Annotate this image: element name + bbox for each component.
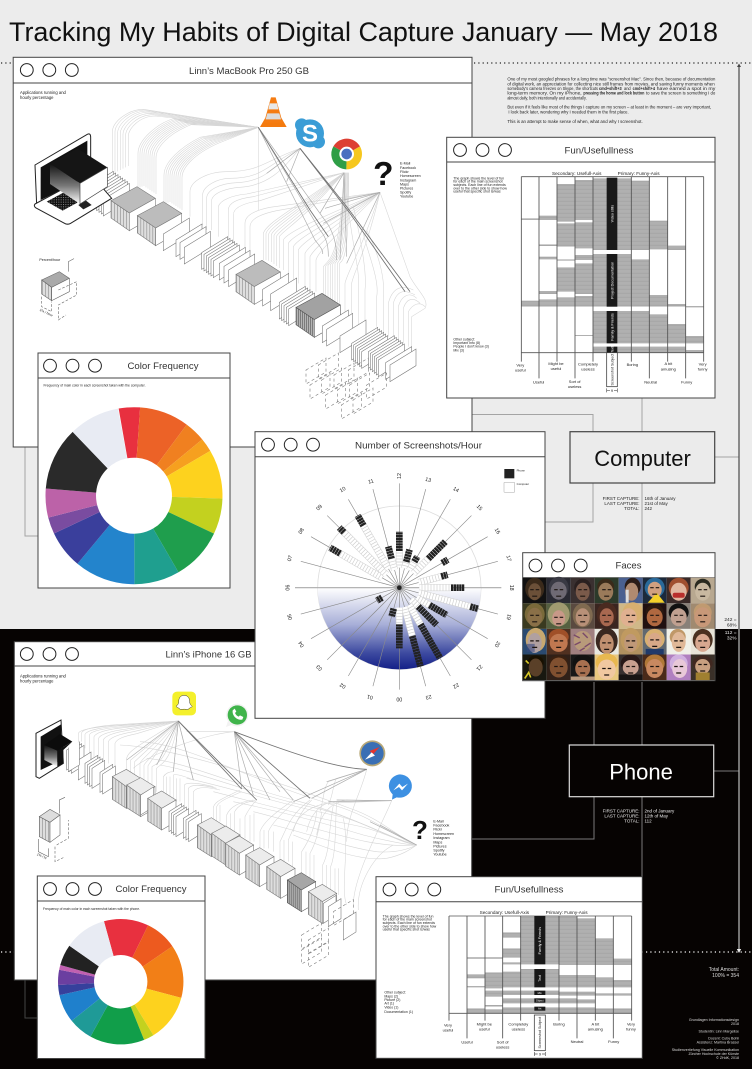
legend: percent per hour <box>39 258 77 320</box>
intro text: This is an attempt to make sense of when, what and why I screenshot. <box>507 119 643 124</box>
axes <box>449 916 632 1038</box>
window buttons <box>454 144 511 156</box>
intro text: long-term memory. On my iPhone, <box>507 91 582 96</box>
hour labels: 17 <box>504 555 512 562</box>
phone capture stats: 2nd of January <box>644 808 675 814</box>
panel: Phone label box: Phone <box>609 760 673 784</box>
computer share: 68% <box>727 622 737 628</box>
window buttons <box>44 883 101 895</box>
heading: Number of Screenshots/Hour <box>355 440 483 452</box>
axis labels: Funny <box>681 380 692 385</box>
subject blocks <box>607 178 617 353</box>
other subject list: Mix (3) <box>453 349 464 353</box>
axis labels: Might be <box>477 1022 492 1027</box>
window buttons <box>20 648 78 660</box>
caption: hourly percentage <box>20 95 54 100</box>
description: The graph shows the level of fun <box>383 914 434 918</box>
icon: Skype <box>295 118 325 148</box>
phone capture stats: LAST CAPTURE: <box>604 814 640 818</box>
flow lines <box>112 109 426 347</box>
axis labels <box>443 1021 636 1049</box>
axes <box>521 177 704 378</box>
hour labels: 21 <box>475 663 483 672</box>
axis titles: Primary: Funny-Axis <box>546 910 588 915</box>
axis labels: Useful <box>461 1040 473 1045</box>
legend: other apps: Instagram <box>433 836 450 840</box>
description: useful that specific shot is/was <box>383 928 430 932</box>
icon: laptop <box>34 134 112 224</box>
panel: Computer label box <box>570 432 715 483</box>
legend: percent per hour <box>36 797 68 862</box>
legend: percent per hour: Percent/hour <box>39 258 61 262</box>
panel: Fun/Usefullness computer <box>447 137 715 398</box>
computer capture stats <box>603 496 676 511</box>
axis labels: Boring <box>553 1022 565 1027</box>
axis labels: funny <box>626 1027 636 1032</box>
total amount: Total Amount: <box>709 967 739 973</box>
legend: other apps: Youtube <box>400 195 413 199</box>
center hub <box>397 585 402 590</box>
subject labels: Family & Friends <box>538 927 542 954</box>
icon: Skype: S <box>302 121 318 148</box>
axis labels: A bit <box>591 1021 599 1026</box>
computer capture stats: 242 <box>644 506 653 511</box>
panel: Phone label box <box>569 745 714 797</box>
credits: Studentin: Linn Margelise <box>698 1030 739 1034</box>
dashed empty hours <box>302 900 353 967</box>
panel: MacBook window <box>13 57 472 447</box>
axis labels: Might be <box>548 361 564 366</box>
axis labels: useless <box>568 384 581 389</box>
phone capture stats: TOTAL: <box>624 818 640 824</box>
axis labels: Very <box>516 362 524 367</box>
description: subjects. Each line of fun extends <box>383 921 435 925</box>
legend: other apps: Facebook <box>433 824 450 828</box>
bands <box>467 917 632 1013</box>
caption: Frequency of main color in each screenshot taken with the phone. <box>43 907 140 911</box>
screenshot subject box <box>534 1015 545 1057</box>
window buttons <box>44 359 101 372</box>
screenshot subject box: 9 <box>539 1052 542 1057</box>
hour labels: 14 <box>452 486 460 494</box>
axis labels: Completely <box>508 1022 528 1027</box>
phone capture stats <box>603 808 675 824</box>
intro text: almost daily, both intentionally and accidentally. <box>507 95 587 100</box>
chart: radial hours <box>285 469 529 702</box>
total axis with arrows <box>737 64 741 953</box>
application flow diagram: phone <box>20 674 454 967</box>
legend: percent per hour: 1% / hr <box>36 852 48 861</box>
description: for each of the main screenshot <box>453 180 503 184</box>
credits: Dozent: Cuby Bohli <box>708 1036 739 1040</box>
intro text: cmd+shift+4 <box>633 86 656 91</box>
panel: Number of Screenshots per Hour <box>255 432 545 718</box>
hour labels: 05 <box>287 613 294 620</box>
panel: Color Frequency phone <box>37 876 205 1058</box>
axis labels: Very <box>444 1023 452 1028</box>
axis titles: Primary: Funny-Axis <box>618 171 660 176</box>
window buttons <box>383 883 441 896</box>
subject labels: Text <box>610 346 614 353</box>
other subject list: Other subject: <box>453 337 475 341</box>
axis labels: Funny <box>608 1039 619 1044</box>
heading: Fun/Usefullness <box>494 884 564 896</box>
axis labels: useless <box>581 367 595 372</box>
screenshot subject box: Screenshot Subject <box>610 354 614 386</box>
computer capture stats: TOTAL: <box>624 506 640 511</box>
computer share: 242 = <box>724 617 737 623</box>
subject labels: Object <box>536 999 544 1003</box>
description: useful that specific shot is/was <box>453 190 501 194</box>
intro text: But even if it feels like most of the things I capture on my screen – at least in the moment – are very important, <box>507 105 711 110</box>
background: black phone half <box>0 629 752 1069</box>
subject labels: Art <box>538 1007 542 1011</box>
axis labels: useful <box>551 366 561 371</box>
dotted timeline bottom <box>1 951 752 953</box>
heading: MacBook: Linn’s MacBook Pro 250 GB <box>189 66 309 77</box>
legend: other apps: Spotify <box>433 849 445 853</box>
axis labels: funny <box>698 367 708 372</box>
panel: Color Frequency computer <box>38 353 230 588</box>
heading: Color Frequency <box>128 361 199 372</box>
hour labels: 12 <box>397 473 403 479</box>
axis titles: Secondary: Usefull-Axis <box>552 171 602 176</box>
subject labels <box>536 927 544 1011</box>
panel: Computer label box: Computer <box>594 446 691 471</box>
intro text: I look back later, wondering why I needed them in the first place. <box>508 109 629 114</box>
legend: other apps: Pictures <box>400 186 413 190</box>
heading: Fun/Usefullness <box>564 146 634 156</box>
legend: Phone <box>517 469 525 473</box>
intro text: cmd+shift+3 <box>599 86 622 91</box>
axis labels: Neutral <box>571 1039 584 1044</box>
subject labels: Family & Friends <box>610 313 614 341</box>
credits: Zürcher Hochschule der Künste <box>688 1052 739 1056</box>
panel: Faces <box>523 553 715 681</box>
donut: computer colors <box>61 422 207 569</box>
icon: Snapchat <box>172 692 196 715</box>
hour labels: 02 <box>339 681 347 689</box>
hour labels: 18 <box>508 585 514 591</box>
hour labels: 04 <box>298 640 306 648</box>
intro text: to save the screen is something I do <box>646 91 716 96</box>
axis labels: useful <box>515 367 526 372</box>
screenshot subject box: 9 <box>611 388 614 393</box>
description: for each of the main screenshot <box>383 918 432 922</box>
intro text: One of my most googled phrases for a long time was "screenshot Mac". Since then, because of documentation <box>507 77 716 82</box>
axis labels: amusing <box>661 366 676 371</box>
other subject list: Other subject: <box>384 991 406 995</box>
connector lines phone <box>25 682 739 1018</box>
legend: other apps: E-Mail <box>433 819 444 823</box>
axis labels: useful <box>479 1026 490 1031</box>
data stacks and boxes <box>87 171 416 382</box>
title: Tracking My Habits of Digital Capture January — May 2018 <box>9 17 718 47</box>
description: subjects. Each line of fun extends <box>453 183 506 187</box>
connector lines computer <box>25 398 739 553</box>
subject labels: Project Documentation <box>610 262 614 299</box>
legend: other apps: Facebook <box>400 166 416 170</box>
description: over to the other side to show how <box>453 186 507 190</box>
other subject list: Important Info (8) <box>453 341 480 345</box>
intro text: have earned a spot in my <box>657 86 717 91</box>
intro text: of digital work, an appreciation for collecting nice still frames from movies, and saving funny moments when <box>507 81 715 86</box>
legend: other apps: Pictures <box>433 844 447 848</box>
axis labels: Sort of <box>569 379 581 384</box>
axis labels: amusing <box>588 1026 603 1031</box>
computer capture stats: 16th of January <box>644 496 676 501</box>
caption: Frequency of main color in each screenshot taken with the computer. <box>44 384 146 388</box>
axis labels: Useful <box>533 380 544 385</box>
legend: other apps: Spotify <box>400 191 411 195</box>
phone capture stats: 12th of May <box>644 814 669 818</box>
description: The graph shows the level of fun <box>453 176 504 180</box>
window buttons <box>262 438 319 451</box>
credits: 2018 <box>731 1022 739 1026</box>
legend <box>504 469 529 492</box>
hour labels: 09 <box>315 504 324 512</box>
heading: Faces <box>616 560 642 572</box>
legend: percent per hour: 1% / hour <box>39 308 54 318</box>
subject labels: Video stills <box>610 205 614 222</box>
icon: Messenger <box>389 774 412 800</box>
dashed empty hours <box>306 353 387 419</box>
screenshot subject box: Screenshot Subject <box>538 1017 542 1049</box>
intro text: pressing the home and lock button <box>583 91 645 96</box>
legend: other apps: Homescreen <box>400 174 421 178</box>
axis labels: useful <box>443 1027 453 1032</box>
darkest flow lines <box>178 721 367 800</box>
data stacks and boxes <box>67 742 356 940</box>
credits: Assistenz: Martina Brassel <box>697 1040 739 1044</box>
axis labels: Completely <box>578 362 598 367</box>
computer bars <box>340 526 470 636</box>
legend: other apps: Instagram <box>400 178 416 182</box>
dotted timeline top <box>1 62 752 64</box>
panel: Fun/Usefullness phone <box>376 877 642 1058</box>
axis labels: Neutral <box>644 380 657 385</box>
hour labels: 20 <box>493 640 501 648</box>
hour labels: 06 <box>285 585 291 591</box>
legend: Computer <box>517 482 529 486</box>
credits: Grundlagen Informationsdesign <box>689 1018 739 1022</box>
subject labels <box>610 205 614 353</box>
hour spokes and labels <box>285 473 514 702</box>
hour labels: 15 <box>475 504 483 512</box>
subject labels: Text <box>538 975 542 982</box>
subject labels: Mix <box>538 991 542 995</box>
description: over to the other side to show how <box>383 924 437 928</box>
hour labels: 11 <box>368 478 375 486</box>
other subject list: Maps (2) <box>384 994 398 998</box>
caption: Applications running and <box>20 674 66 679</box>
computer capture stats: FIRST CAPTURE: <box>603 496 640 501</box>
axis labels: Boring <box>627 362 638 367</box>
phone share: 112 = <box>725 630 737 636</box>
intro text: somebody's camera freezes on Skype, the shortcuts <box>507 86 598 91</box>
hour labels: 10 <box>339 486 347 494</box>
total amount: 100% = 354 <box>712 973 739 979</box>
donut: phone colors <box>66 927 176 1037</box>
phone bars <box>330 515 478 667</box>
icon: phone <box>36 720 79 778</box>
other subject list: Video (1) <box>384 1006 398 1010</box>
chart: fun usefulness computer <box>453 171 708 393</box>
subject blocks <box>534 916 545 1011</box>
hour labels: 22 <box>452 681 460 689</box>
icon: question mark: ? <box>373 156 394 193</box>
application flow diagram: computer <box>20 90 426 419</box>
other subject list: People I don't know (3) <box>453 345 489 349</box>
icon: VLC <box>260 97 287 127</box>
heading: iPhone: Linn’s iPhone 16 GB <box>166 650 252 660</box>
phone capture stats: FIRST CAPTURE: <box>603 808 640 814</box>
hour labels: 07 <box>287 555 294 562</box>
axis labels: Sort of <box>497 1040 509 1045</box>
hour labels: 01 <box>367 693 374 700</box>
other subject list: Picture (2) <box>384 998 400 1002</box>
hour labels <box>285 473 514 702</box>
hour labels: 13 <box>424 477 432 484</box>
background: light computer half <box>0 0 752 629</box>
legend: other apps: Maps <box>400 182 409 186</box>
computer capture stats: 21st of May <box>644 501 669 506</box>
legend: other apps: Maps <box>433 840 442 844</box>
credits: Studienvertiefung Visuelle Kommunikation <box>672 1048 739 1052</box>
hour labels: 08 <box>298 527 306 535</box>
dark flow lines <box>258 127 380 263</box>
other subject list: Documentation (1) <box>384 1010 413 1014</box>
legend: other apps: Flickr <box>433 828 443 832</box>
axis labels: Very <box>627 1022 635 1027</box>
screenshot subject box <box>607 353 617 393</box>
axis labels: useless <box>512 1027 525 1032</box>
hour labels: 19 <box>504 613 512 620</box>
legend: other apps: Flickr <box>400 170 410 174</box>
axis labels: Very <box>699 362 707 367</box>
phone share: 32% <box>727 636 737 642</box>
icon: Safari <box>359 740 385 766</box>
credits: © ZHdK, 2018 <box>716 1056 739 1060</box>
photo grid of faces <box>523 577 715 680</box>
window buttons <box>529 559 587 572</box>
icon: question mark: ? <box>412 815 428 845</box>
clock disc <box>318 506 481 669</box>
axis labels: useless <box>496 1044 509 1049</box>
icon: WhatsApp <box>226 704 248 727</box>
dark flow lines <box>127 721 417 845</box>
hour labels: 23 <box>425 693 432 700</box>
intro text: and <box>624 86 631 91</box>
icon: Chrome <box>332 139 362 169</box>
darkest flow lines <box>258 127 410 292</box>
panel: iPhone window <box>14 642 472 980</box>
legend: other apps: Youtube <box>433 853 447 857</box>
computer capture stats: LAST CAPTURE: <box>604 501 640 506</box>
phone capture stats: 112 <box>644 818 652 824</box>
axis labels <box>515 361 708 389</box>
axis labels: A bit <box>664 361 672 366</box>
axis titles: Secondary: Usefull-Axis <box>480 910 530 915</box>
bands <box>521 178 704 353</box>
caption: hourly percentage <box>20 679 54 684</box>
other subject list: Art (1) <box>384 1002 394 1006</box>
legend: other apps: Homescreen <box>433 832 454 836</box>
hour labels: 16 <box>493 527 501 535</box>
hour labels: 00 <box>396 696 402 702</box>
caption: Applications running and <box>20 90 66 95</box>
flow lines <box>78 721 417 910</box>
hour labels: 03 <box>315 663 324 672</box>
heading: Color Frequency <box>116 884 187 895</box>
intro text <box>507 77 717 124</box>
chart: fun usefulness phone <box>383 910 636 1057</box>
window buttons <box>20 64 78 76</box>
legend: other apps: E-Mail <box>400 162 411 166</box>
